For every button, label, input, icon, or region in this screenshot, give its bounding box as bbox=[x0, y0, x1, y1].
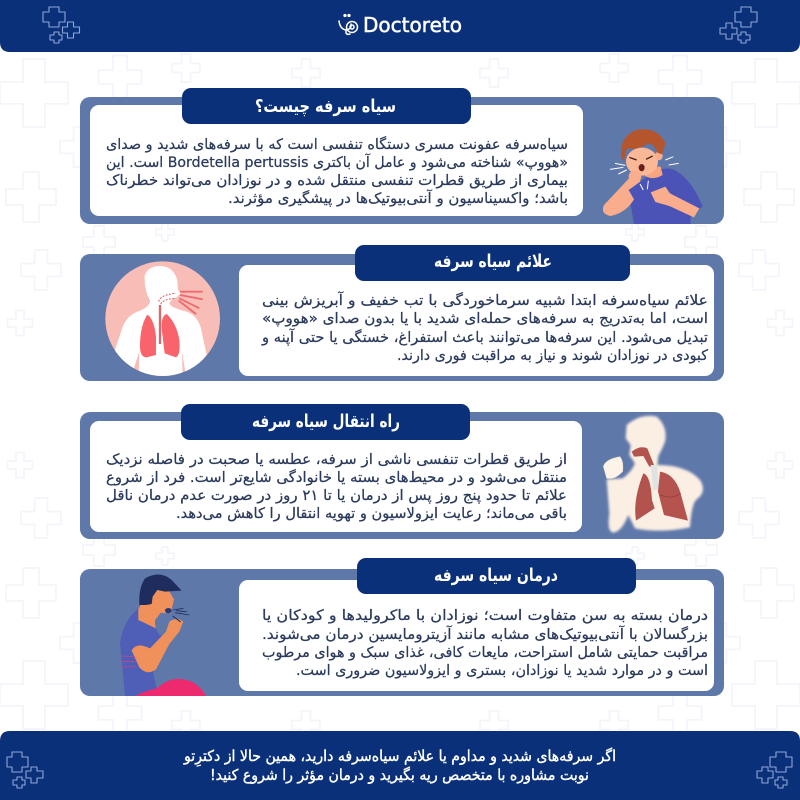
text box bbox=[239, 580, 714, 691]
body text bbox=[106, 452, 567, 522]
text box bbox=[239, 265, 714, 376]
body text: علائم سیاه‌سرفه ابتدا شبیه سرماخوردگی با تب خفیف و آبریزش بینی bbox=[262, 291, 708, 309]
heading pill: درمان سیاه سرفه bbox=[434, 566, 558, 586]
body text: باقی می‌ماند؛ رعایت ایزولاسیون و تهویه انتقال را کاهش می‌دهد. bbox=[176, 506, 567, 522]
body text: علائم تا حدود پنج روز پس از درمان یا تا ۲۱ روز در صورت عدم درمان ناقل bbox=[106, 488, 567, 504]
body text: منتقل می‌شود و در محیط‌های بسته یا خانوادگی شایع‌تر است. فرد از شروع bbox=[106, 469, 567, 486]
body text: کبودی در نوزادان شوند و نیاز به مراقبت فوری دارند. bbox=[397, 348, 708, 364]
icon: header crosses right bbox=[720, 7, 757, 43]
body text bbox=[106, 136, 568, 207]
footer text: نوبت مشاوره با متخصص ریه بگیرید و درمان مؤثر را شروع کنید! bbox=[210, 766, 589, 784]
panel: transmission bbox=[80, 404, 724, 539]
heading pill: سیاه سرفه چیست؟ bbox=[255, 97, 396, 117]
body text bbox=[261, 291, 708, 364]
text box bbox=[90, 421, 582, 532]
body text bbox=[262, 608, 708, 679]
icon: stethoscope logo bbox=[339, 15, 358, 34]
body text: است و در موارد شدید یا نوزادان، بستری و ایزولاسیون ضروری است. bbox=[296, 663, 708, 679]
body text: باشد؛ واکسیناسیون و آنتی‌بیوتیک‌ها در پیشگیری مؤثرند. bbox=[228, 189, 568, 207]
illustration: man coughing with visible lungs bbox=[603, 416, 703, 533]
body text: «هووپ» شناخته می‌شود و عامل آن باکتری Bordetella pertussis است. این bbox=[106, 153, 568, 171]
body text: سیاه‌سرفه عفونت مسری دستگاه تنفسی است که با سرفه‌های شدید و صدای bbox=[106, 136, 568, 153]
heading pill: علائم سیاه سرفه bbox=[434, 252, 552, 272]
body text: است، اما به‌تدریج به سرفه‌های حمله‌ای شدید با یا بدون صدای «هووپ» bbox=[262, 311, 708, 327]
footer text: اگر سرفه‌های شدید و مداوم یا علائم سیاه‌سرفه دارید، همین حالا از دکترِتو bbox=[183, 747, 616, 768]
panel: symptoms bbox=[80, 245, 724, 381]
footer text bbox=[183, 747, 616, 784]
body text: درمان بسته به سن متفاوت است؛ نوزادان با ماکرولیدها و کودکان یا bbox=[262, 608, 708, 624]
heading pill bbox=[181, 404, 470, 440]
body text: مراقبت حمایتی شامل استراحت، مایعات کافی، غذای سبک و هوای مرطوب bbox=[262, 645, 708, 661]
icon: footer crosses left bbox=[7, 752, 43, 788]
icon: footer crosses right bbox=[757, 752, 792, 788]
panel: treatment bbox=[80, 558, 724, 697]
icon: header crosses left bbox=[43, 7, 80, 43]
body text: تبدیل می‌شود. این سرفه‌ها می‌توانند باعث استفراغ، خستگی یا حتی آپنه و bbox=[261, 328, 708, 346]
heading pill: راه انتقال سیاه سرفه bbox=[252, 412, 400, 432]
illustration: lungs and airway bbox=[105, 261, 220, 380]
heading pill bbox=[182, 88, 471, 124]
panel: what is whooping cough bbox=[80, 88, 724, 224]
text box bbox=[90, 105, 583, 216]
footer call to action bbox=[0, 731, 800, 800]
heading pill bbox=[357, 558, 636, 594]
heading pill bbox=[355, 245, 630, 281]
illustration: man coughing into hand bbox=[120, 575, 206, 697]
logo wordmark: Doctoreto bbox=[363, 13, 462, 37]
body text: از طریق قطرات تنفسی ناشی از سرفه، عطسه یا صحبت در فاصله نزدیک bbox=[106, 452, 567, 468]
body text: بیماری از طریق قطرات تنفسی منتقل شده و در نوزادان می‌تواند خطرناک bbox=[106, 173, 568, 189]
illustration: coughing boy bbox=[603, 129, 703, 224]
header bar bbox=[0, 0, 800, 52]
body text: بزرگسالان با آنتی‌بیوتیک‌های مشابه مانند آزیترومایسین درمان می‌شوند. bbox=[262, 625, 708, 643]
